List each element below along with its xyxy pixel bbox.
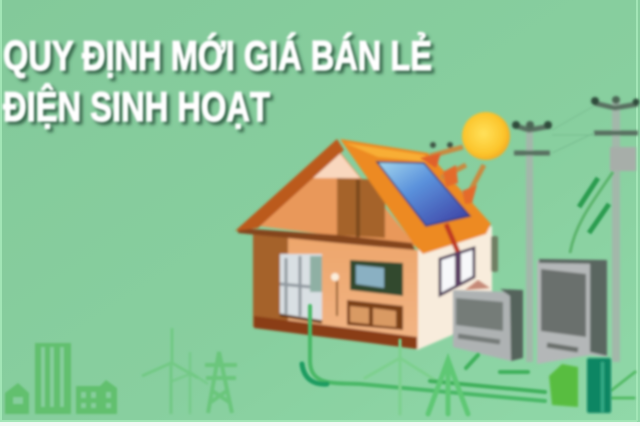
icon: wind turbine	[142, 328, 198, 414]
stair column shade	[356, 179, 360, 237]
icon: pylon	[205, 352, 237, 413]
pole 2	[591, 96, 640, 362]
roof left edge	[235, 139, 344, 231]
title text	[3, 31, 432, 130]
title text: QUY ĐỊNH MỚI GIÁ BÁN LẺ	[3, 31, 432, 79]
title shadow	[6, 34, 435, 133]
title text: ĐIỆN SINH HOẠT	[3, 82, 270, 130]
icon: second turbine	[170, 352, 208, 414]
house	[235, 139, 498, 350]
wind turbines and pylon, left	[142, 328, 237, 414]
tv	[350, 260, 403, 296]
stair column	[337, 178, 385, 238]
left meter	[453, 289, 523, 361]
title shadow: QUY ĐỊNH MỚI GIÁ BÁN LẺ	[6, 34, 435, 82]
teal battery socket	[587, 358, 611, 413]
power lines	[552, 106, 594, 153]
solar panel	[377, 162, 470, 226]
icon: row houses	[76, 380, 117, 414]
wall lamp	[331, 273, 339, 316]
floor	[254, 316, 417, 349]
gable upper	[310, 150, 360, 178]
gable	[258, 148, 416, 246]
roof right slope	[340, 139, 491, 254]
icon: small house	[5, 383, 29, 414]
side wall	[417, 226, 492, 350]
title shadow: ĐIỆN SINH HOẠT	[6, 85, 273, 133]
icon: tall building	[35, 343, 71, 414]
red meter link	[465, 280, 490, 290]
city icons: house, tower, row houses	[5, 343, 117, 414]
right meter	[537, 259, 607, 364]
roof ridge highlight	[345, 143, 430, 162]
tv cabinet	[347, 300, 403, 330]
side window	[440, 248, 474, 295]
sun rays	[420, 142, 484, 204]
side pipe	[491, 236, 498, 272]
green plug	[549, 364, 578, 407]
green arrows beside pole	[570, 172, 613, 253]
red cable	[446, 224, 458, 276]
fridge	[280, 254, 322, 322]
side window divider	[455, 252, 461, 286]
left interior wall	[253, 234, 288, 327]
pole 1	[512, 121, 552, 362]
front wall	[253, 232, 418, 349]
sun	[462, 112, 510, 160]
bottom white strip	[0, 422, 640, 426]
title	[3, 31, 435, 133]
gable beam	[238, 228, 415, 250]
green ground wiring	[302, 306, 635, 414]
